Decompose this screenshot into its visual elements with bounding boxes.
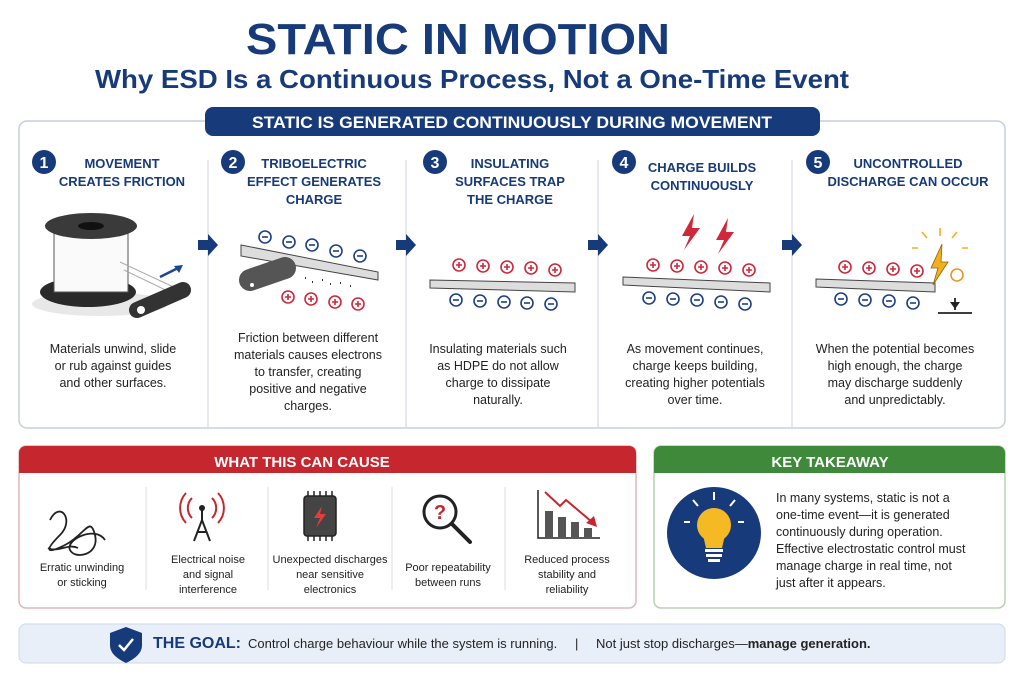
item: noise [171, 493, 245, 596]
step 3: INSULATING [471, 156, 549, 171]
panel: key takeaway [654, 446, 1005, 608]
item: noise: Electrical noise [171, 554, 245, 566]
step 1 [32, 150, 185, 390]
step 5: DISCHARGE CAN OCCUR [827, 174, 989, 189]
step 3: as HDPE do not allow [437, 359, 560, 373]
step 4: 4 [620, 155, 629, 172]
icon: spool [32, 213, 183, 316]
step 3: Insulating materials such [429, 342, 567, 356]
item: declining chart [524, 490, 610, 596]
step 1: MOVEMENT [84, 156, 160, 171]
goal text: manage generation. [748, 636, 871, 651]
goal text: Control charge behaviour while the system is running. [248, 636, 557, 651]
text: takeaway: continuously during operation. [776, 525, 943, 539]
item: erratic: or sticking [57, 577, 107, 589]
step 2: materials causes electrons [234, 348, 382, 362]
step 1: and other surfaces. [59, 376, 167, 390]
text: takeaway: one-time event—it is generated [776, 508, 950, 522]
panel: what this can cause [19, 446, 636, 608]
step 4: creating higher potentials [625, 376, 765, 390]
item: chip: Unexpected discharges [273, 554, 388, 566]
step 3: charge to dissipate [446, 376, 551, 390]
goal text: Not just stop discharges— [596, 636, 748, 651]
step 4: As movement continues, [627, 342, 763, 356]
step 5: high enough, the charge [828, 359, 962, 373]
step 2: 2 [229, 155, 238, 172]
icon: shield [110, 627, 142, 663]
item: erratic: Erratic unwinding [40, 562, 124, 574]
text: takeaway: Effective electrostatic control must [776, 542, 966, 556]
step 1: CREATES FRICTION [59, 174, 185, 189]
step 5 [806, 150, 989, 407]
goal text: | [575, 636, 578, 651]
step 1: or rub against guides [55, 359, 171, 373]
arrow 3 [588, 234, 608, 256]
step 5: UNCONTROLLED [853, 156, 963, 171]
step 2: TRIBOELECTRIC [261, 156, 367, 171]
subtitle: Why ESD Is a Continuous Process, Not a One-Time Event [95, 64, 849, 94]
step 3: THE CHARGE [467, 192, 553, 207]
item: noise: interference [179, 584, 237, 596]
arrow 2 [396, 234, 416, 256]
step 2: positive and negative [249, 382, 367, 396]
arrow 4 [782, 234, 802, 256]
step 1: 1 [40, 155, 49, 172]
step 1: Materials unwind, slide [50, 342, 176, 356]
item: chip: near sensitive [296, 569, 364, 581]
step 3 [423, 150, 575, 407]
goal bar [19, 624, 1005, 663]
step 5: may discharge suddenly [828, 376, 963, 390]
item: magnifier: between runs [415, 577, 482, 589]
step 2 [221, 150, 382, 413]
step 2: Friction between different [238, 331, 379, 345]
title: STATIC IN MOTION [246, 15, 670, 64]
heading: KEY TAKEAWAY [771, 454, 889, 471]
text: takeaway: manage charge in real time, not [776, 559, 952, 573]
banner: STATIC IS GENERATED CONTINUOUSLY DURING MOVEMENT [252, 113, 773, 132]
item: chip: electronics [304, 584, 357, 596]
icon: discharge to ground [816, 228, 972, 313]
step 4: over time. [668, 393, 722, 407]
item: declining chart: Reduced process [524, 554, 610, 566]
step 4: CONTINUOUSLY [651, 178, 754, 193]
step 2: to transfer, creating [254, 365, 362, 379]
step 4: charge keeps building, [632, 359, 758, 373]
step 3: SURFACES TRAP [455, 174, 565, 189]
text: takeaway: In many systems, static is not a [776, 491, 950, 505]
step 3: naturally. [473, 393, 523, 407]
item: magnifier [405, 496, 491, 589]
arrow 1 [198, 234, 218, 256]
item: erratic [40, 512, 124, 589]
item: noise: and signal [183, 569, 233, 581]
banner [205, 107, 820, 136]
item: declining chart: reliability [546, 584, 589, 596]
item: magnifier: Poor repeatability [405, 562, 491, 574]
icon: bolts and bar [623, 214, 770, 310]
step 2: EFFECT GENERATES [247, 174, 381, 189]
step 5: and unpredictably. [844, 393, 946, 407]
text: takeaway: just after it appears. [775, 576, 886, 590]
step 3: 3 [431, 155, 440, 172]
step 5: When the potential becomes [816, 342, 974, 356]
panel: process steps [19, 107, 1005, 428]
step 4 [612, 150, 770, 407]
step 5: 5 [814, 155, 823, 172]
icon: insulating bar [430, 259, 575, 310]
step 2: charges. [284, 399, 332, 413]
icon: light bulb [667, 487, 761, 579]
item: declining chart: stability and [538, 569, 596, 581]
heading: WHAT THIS CAN CAUSE [214, 454, 390, 471]
step 4: CHARGE BUILDS [648, 160, 756, 175]
item: chip [273, 491, 388, 596]
item: magnifier: ? [434, 502, 446, 524]
icon: roller and film [241, 231, 378, 310]
step 2: CHARGE [286, 192, 342, 207]
goal text: THE GOAL: [153, 635, 241, 652]
